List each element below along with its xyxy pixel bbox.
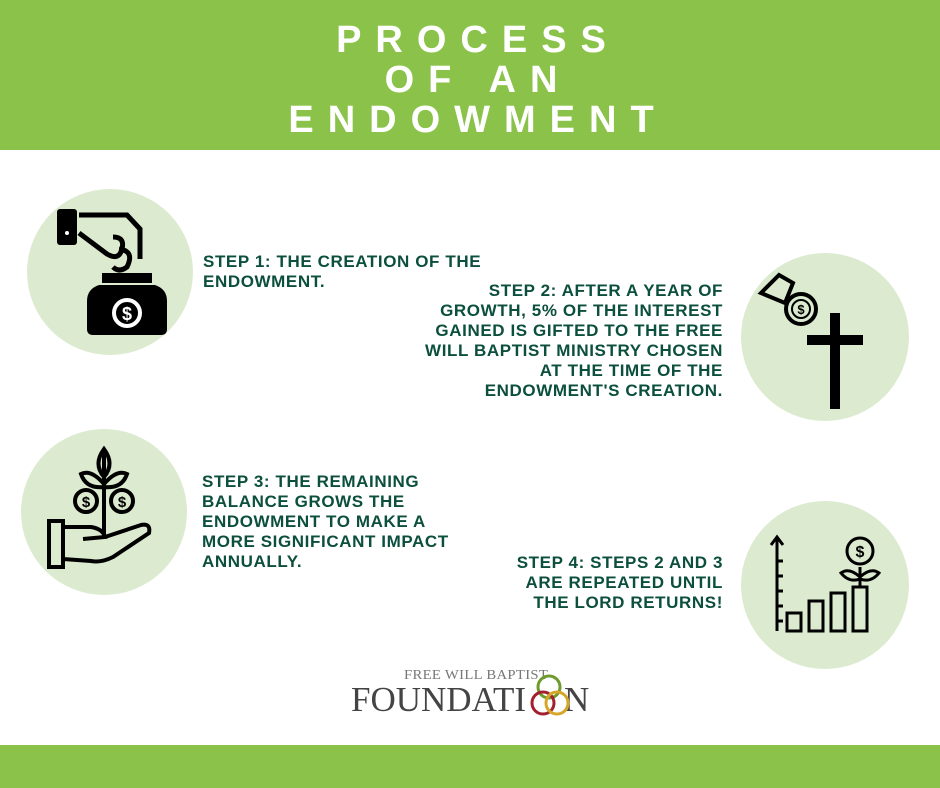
circle: step 2 icon: [741, 253, 909, 421]
circle: step 1 icon: [27, 189, 193, 355]
step 3 text: BALANCE GROWS THE: [202, 492, 405, 511]
step 3 text: STEP 3: THE REMAINING: [202, 472, 419, 491]
step 1 text: STEP 1: THE CREATION OF THE: [203, 252, 481, 271]
step 4 text: THE LORD RETURNS!: [533, 593, 723, 612]
step 1 text: ENDOWMENT.: [203, 272, 325, 291]
step 2 text: GROWTH, 5% OF THE INTEREST: [440, 301, 723, 320]
icon: coin and cross: [758, 272, 863, 409]
logo: FREE WILL BAPTIST: [404, 668, 548, 683]
icon: hand with money plant: [47, 446, 152, 569]
step 2 text: ENDOWMENT'S CREATION.: [485, 381, 723, 400]
icon: coin and cross: $: [797, 302, 805, 317]
title: [288, 19, 668, 141]
title: PROCESS: [336, 19, 620, 61]
step 3 text: MORE SIGNIFICANT IMPACT: [202, 532, 449, 551]
step 2 text: GAINED IS GIFTED TO THE FREE: [435, 321, 723, 340]
step 1 text: [203, 252, 481, 291]
logo: FOUNDATI: [351, 680, 526, 719]
icon: growth bar chart: [770, 534, 882, 632]
circle: step 4 icon: [741, 501, 909, 669]
step 3 text: [202, 472, 449, 571]
step 2 text: [425, 281, 723, 400]
circle: step 3 icon: [21, 429, 187, 595]
title: ENDOWMENT: [288, 99, 668, 141]
icon: growth bar chart: $: [856, 544, 865, 561]
logo: [351, 668, 589, 719]
icon: hand with money plant: $: [118, 494, 127, 511]
icon: logo rings: [530, 674, 570, 716]
footer band: [0, 745, 940, 788]
icon: hand dropping coin into jar: [57, 209, 167, 335]
step 2 text: STEP 2: AFTER A YEAR OF: [489, 281, 723, 300]
icon: hand with money plant: $: [82, 494, 91, 511]
icon: hand dropping coin into jar: $: [122, 304, 132, 324]
step 2 text: WILL BAPTIST MINISTRY CHOSEN: [425, 341, 723, 360]
step 4 text: STEP 4: STEPS 2 AND 3: [517, 553, 723, 572]
step 3 text: ANNUALLY.: [202, 552, 302, 571]
step 2 text: AT THE TIME OF THE: [540, 361, 723, 380]
step 4 text: [517, 553, 723, 612]
title: OF AN: [385, 59, 571, 101]
logo: N: [564, 680, 589, 719]
header band: [0, 0, 940, 150]
step 3 text: ENDOWMENT TO MAKE A: [202, 512, 426, 531]
step 4 text: ARE REPEATED UNTIL: [526, 573, 723, 592]
